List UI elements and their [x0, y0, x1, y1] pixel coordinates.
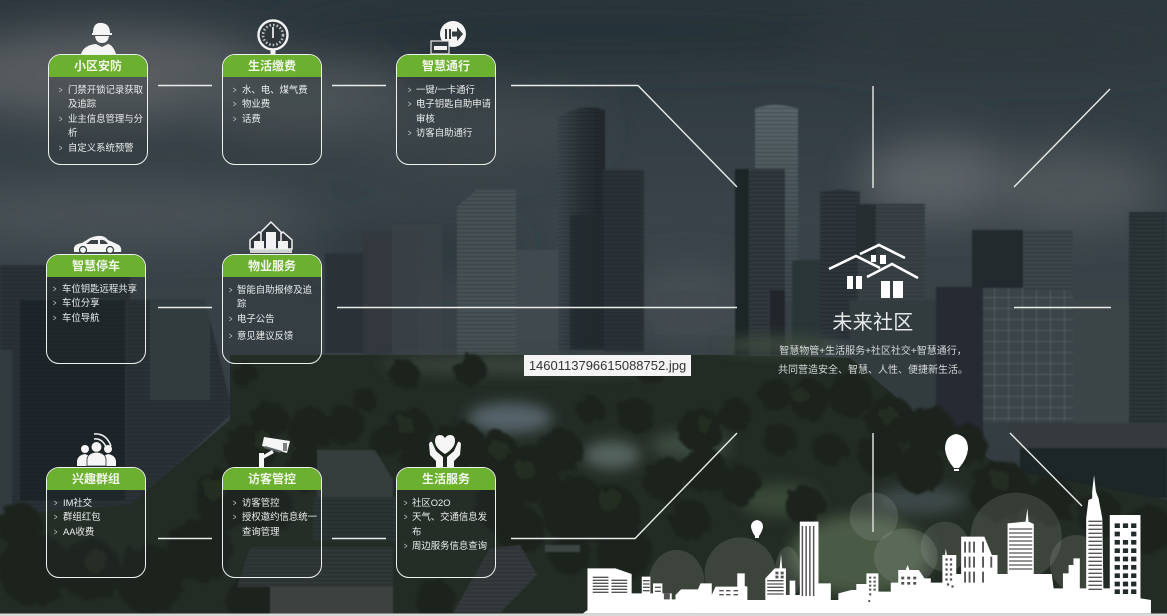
icon: future community houses	[829, 245, 918, 298]
card text: 智慧通行 list: 审核	[416, 113, 435, 124]
card text: 生活服务 list	[404, 497, 487, 551]
card text: 生活缴费 list: 物业费	[242, 98, 270, 109]
card text: 小区安防 list: >	[59, 142, 62, 152]
card: 物业服务: 物业服务	[248, 259, 296, 273]
card text: 访客管控 list: 授权邀约信息统一	[242, 511, 317, 522]
card: 智慧停车: 智慧停车	[72, 259, 120, 273]
card text: 物业服务 list: 智能自助报修及追	[237, 284, 312, 295]
card: 小区安防: 小区安防	[74, 59, 122, 73]
card text: 智慧停车 list: 车位分享	[62, 297, 100, 308]
card: 智慧通行	[396, 54, 496, 165]
card text: 访客管控 list	[233, 497, 317, 537]
card text: 小区安防 list: 自定义系统预警	[68, 142, 134, 152]
card text: 小区安防 list: 门禁开锁记录获取	[68, 84, 143, 95]
icon: houses	[250, 222, 292, 253]
card text: 生活缴费 list: 话费	[242, 113, 261, 124]
icon: gauge	[258, 20, 288, 55]
card text: 生活服务 list: 社区O2O	[412, 497, 451, 508]
card text: 访客管控 list: 查询管理	[242, 526, 280, 537]
card text: 小区安防 list: >	[59, 85, 62, 95]
card text: 生活服务 list: 布	[412, 526, 421, 537]
card text: 生活服务 list: >	[404, 498, 407, 508]
card text: 小区安防 list: 及追踪	[68, 98, 96, 109]
card text: 访客管控 list: >	[233, 498, 236, 508]
card: 生活服务: 生活服务	[422, 472, 470, 486]
card text: 智慧通行 list: >	[408, 85, 411, 95]
card text: 智慧通行 list: 访客自助通行	[416, 127, 472, 138]
card text: 兴趣群组 list	[54, 497, 101, 537]
card: 访客管控: 访客管控	[248, 472, 296, 486]
card text: 智慧停车 list: >	[53, 298, 56, 308]
card text: 生活缴费 list: >	[233, 114, 236, 124]
connector lines	[158, 86, 1111, 538]
card text: 小区安防 list	[59, 84, 143, 152]
card: 访客管控	[222, 467, 322, 578]
card: 生活缴费: 生活缴费	[248, 59, 296, 73]
card: 智慧通行: 智慧通行	[422, 59, 470, 73]
card text: 生活服务 list: 天气、交通信息发	[412, 511, 487, 522]
card text: 兴趣群组 list: >	[54, 498, 57, 508]
ground	[0, 355, 1167, 616]
file name label: 1460113796615088752.jpg	[529, 358, 686, 373]
small balloon	[751, 520, 763, 538]
card text: 智慧停车 list	[53, 283, 137, 323]
card text: 物业服务 list: 意见建议反馈	[237, 330, 293, 341]
trees	[0, 354, 1167, 616]
icon: car	[74, 236, 121, 254]
card text: 小区安防 list: >	[59, 114, 62, 124]
card text: 兴趣群组 list: >	[54, 527, 57, 537]
city skyline silhouette	[583, 475, 1151, 613]
card text: 兴趣群组 list: >	[54, 512, 57, 522]
card: 小区安防	[48, 54, 148, 165]
card text: 访客管控 list: 访客管控	[242, 497, 280, 508]
card text: 生活服务 list: >	[404, 541, 407, 551]
card: 生活服务	[396, 467, 496, 578]
card: 智慧停车	[46, 254, 146, 364]
card text: 智慧通行 list: 电子钥匙自助申请	[416, 98, 491, 109]
center heading and description: 未来社区	[832, 312, 914, 334]
icon: pass card	[431, 21, 466, 54]
center heading and description: 共同营造安全、智慧、人性、便捷新生活。	[778, 365, 968, 376]
card text: 兴趣群组 list: AA收费	[63, 526, 94, 537]
card text: 生活服务 list: 周边服务信息查询	[412, 540, 487, 551]
file name label	[524, 355, 691, 376]
card text: 智慧通行 list: >	[408, 128, 411, 138]
skyline domes	[649, 493, 1102, 616]
card text: 生活服务 list: >	[404, 512, 407, 522]
card text: 智慧停车 list: 车位导航	[62, 312, 100, 323]
card text: 物业服务 list	[229, 284, 312, 341]
card text: 小区安防 list: 业主信息管理与分	[68, 113, 143, 124]
left building mass	[0, 265, 230, 525]
card: 兴趣群组: 兴趣群组	[72, 472, 120, 486]
card text: 小区安防 list: 析	[68, 127, 77, 138]
card: 生活缴费	[222, 54, 322, 165]
card text: 兴趣群组 list: 群组红包	[63, 511, 101, 522]
card text: 智慧停车 list: 车位钥匙远程共享	[62, 283, 137, 294]
card text: 访客管控 list: >	[233, 512, 236, 522]
icon: security camera	[259, 437, 290, 467]
card text: 物业服务 list: >	[229, 285, 232, 295]
card text: 生活缴费 list	[233, 84, 308, 124]
card text: 智慧通行 list: 一键/一卡通行	[416, 84, 475, 95]
card text: 物业服务 list: 电子公告	[237, 313, 275, 324]
icon: people with signal	[77, 434, 116, 466]
card text: 智慧通行 list: >	[408, 99, 411, 109]
card text: 物业服务 list: 踪	[237, 298, 246, 309]
card text: 智慧停车 list: >	[53, 284, 56, 294]
distant buildings	[0, 104, 1167, 525]
low buildings and roofs	[237, 450, 580, 614]
large balloon	[945, 434, 968, 471]
icon: worker	[81, 23, 116, 54]
card text: 智慧停车 list: >	[53, 313, 56, 323]
card text: 物业服务 list: >	[229, 331, 232, 341]
card text: 物业服务 list: >	[229, 314, 232, 324]
card: 物业服务	[222, 254, 322, 364]
card text: 智慧通行 list	[408, 84, 491, 138]
center heading and description: 智慧物管+生活服务+社区社交+智慧通行，	[779, 346, 967, 357]
card text: 生活缴费 list: >	[233, 99, 236, 109]
card text: 兴趣群组 list: IM社交	[63, 497, 92, 508]
card: 兴趣群组	[46, 467, 146, 578]
card text: 生活缴费 list: >	[233, 85, 236, 95]
icon: heart and hands	[429, 435, 461, 467]
card text: 生活缴费 list: 水、电、煤气费	[242, 84, 308, 95]
center heading and description	[778, 312, 968, 376]
